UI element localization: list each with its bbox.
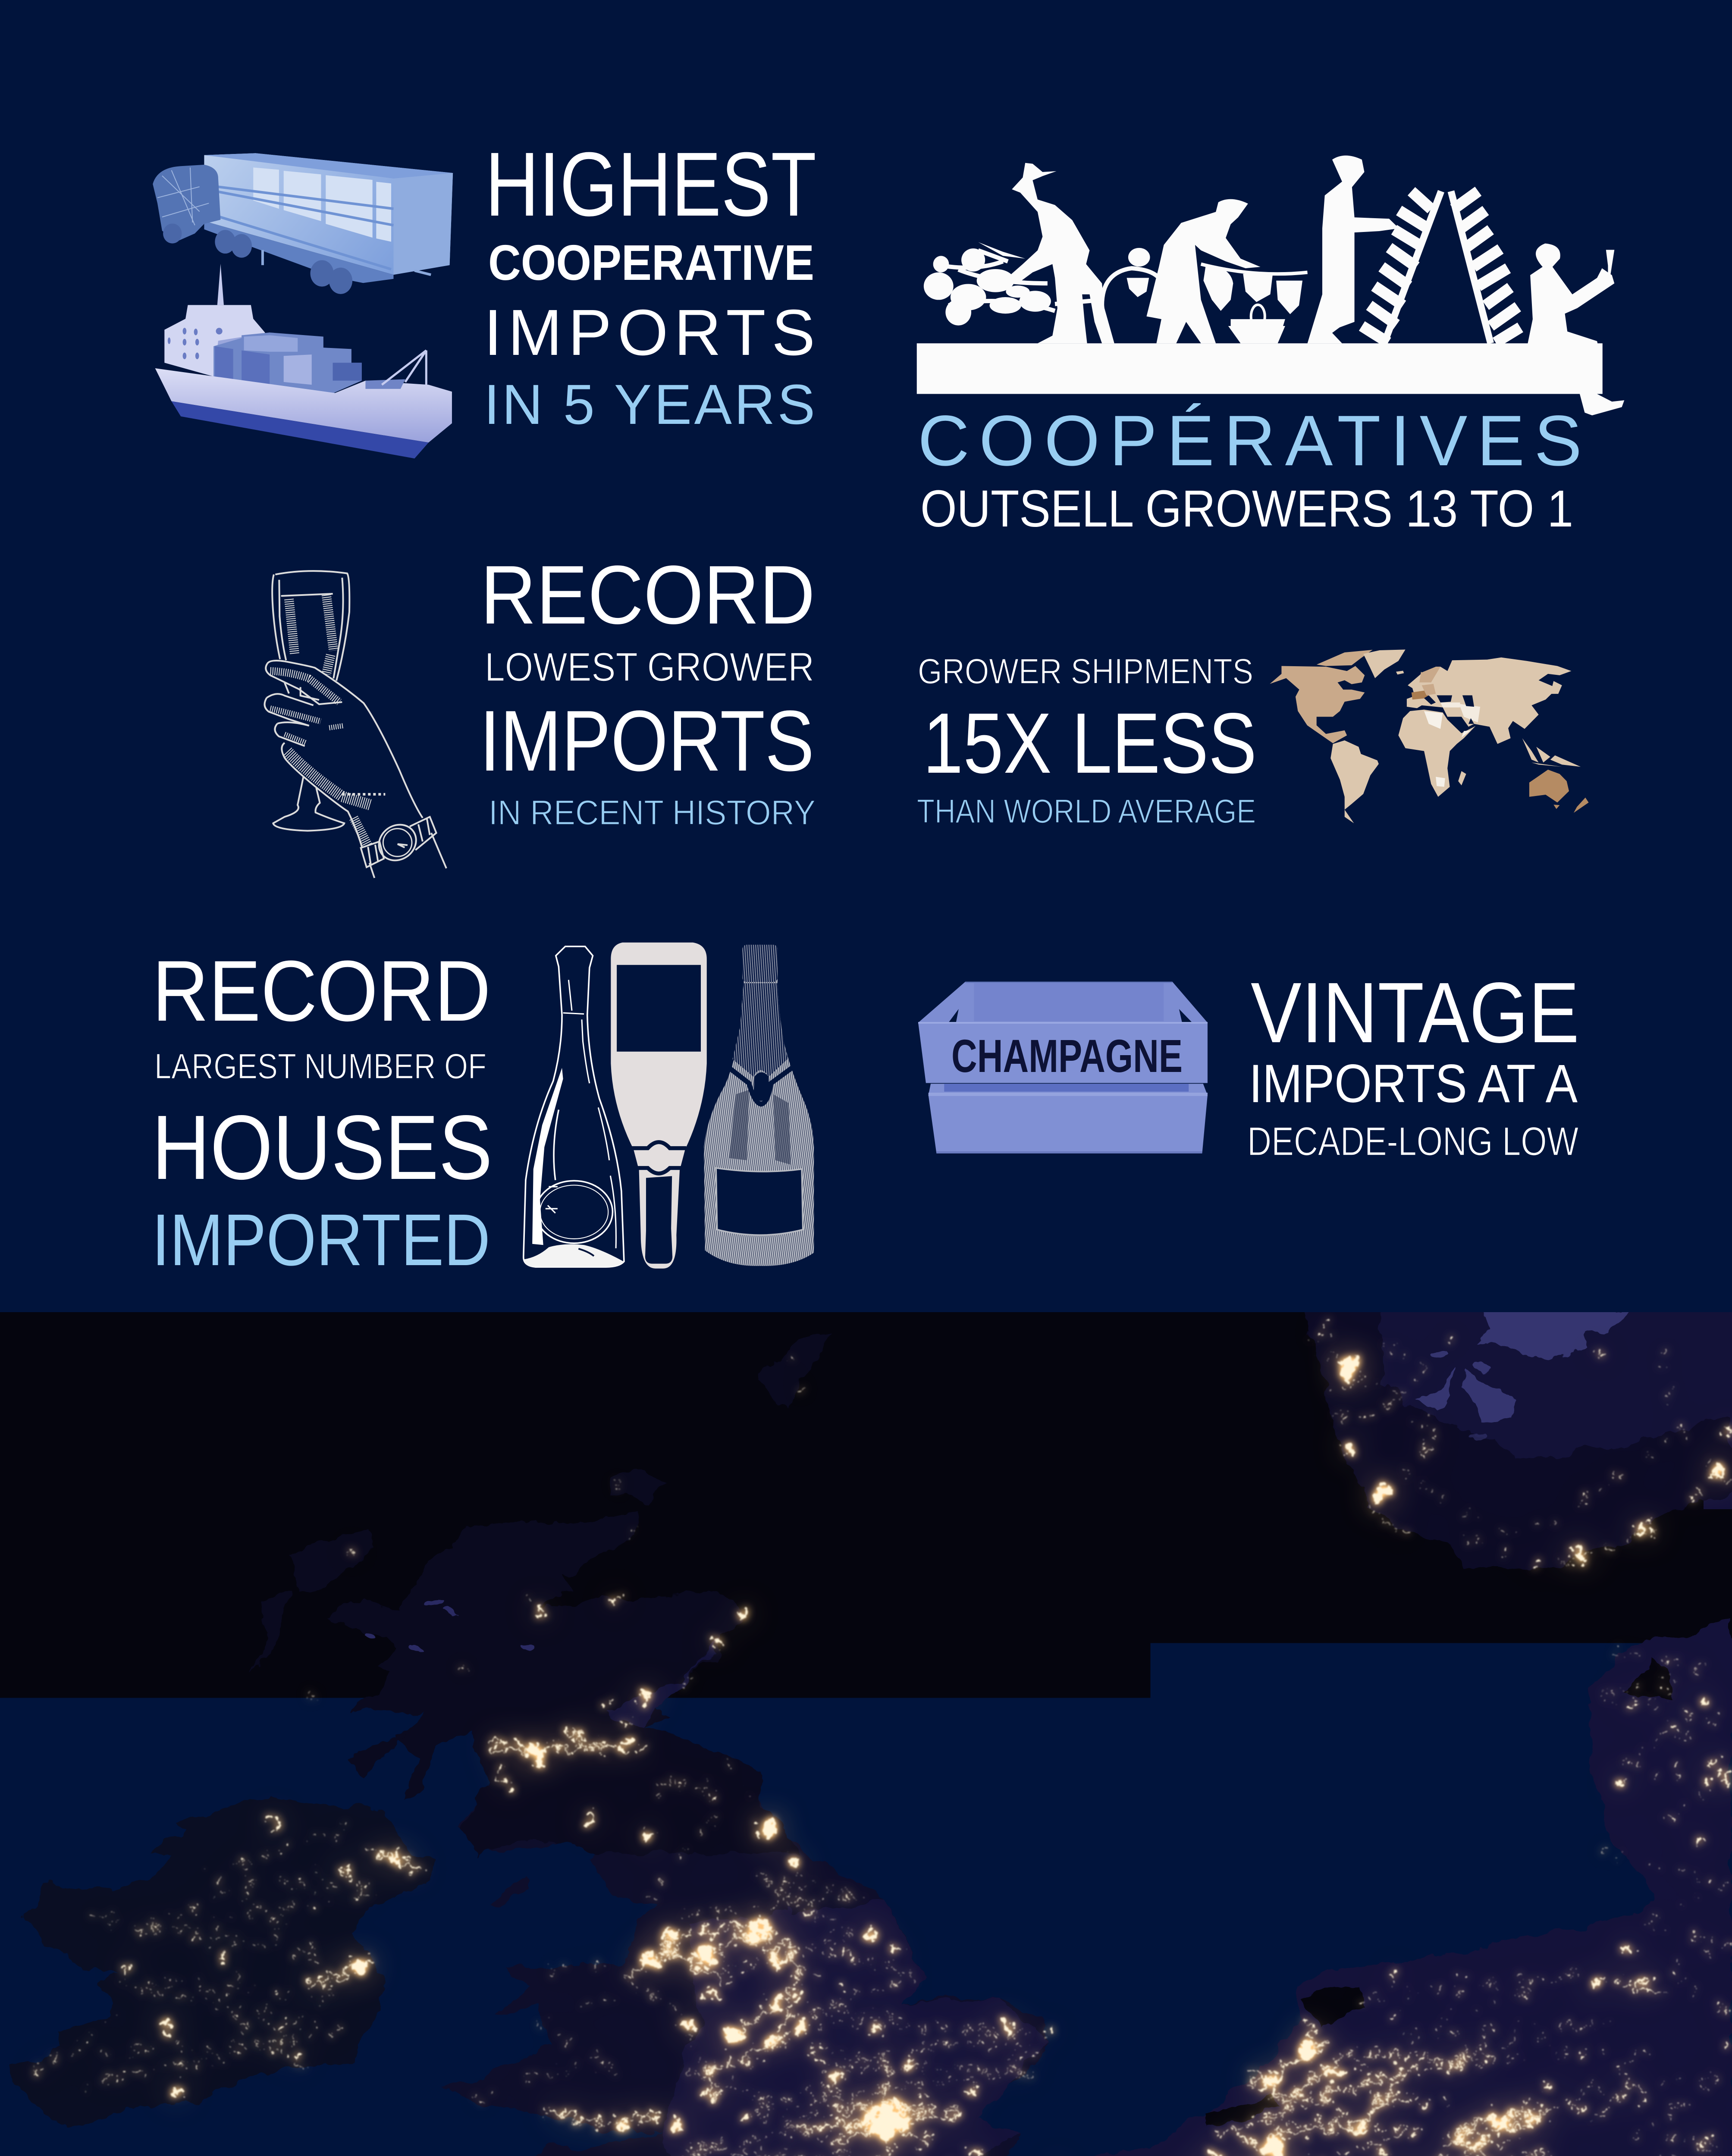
- icon: champagne workers silhouette: [917, 156, 1624, 415]
- land: Norway with snow: [1299, 1294, 1732, 1569]
- heading: highest cooperative imports in 5 years: IN 5 YEARS: [484, 373, 815, 436]
- riddler figure: [1308, 156, 1399, 343]
- heading: record largest number of houses imported: RECORD: [152, 943, 491, 1039]
- pruner figure: [1005, 163, 1114, 343]
- engraved bottle: [704, 945, 814, 1266]
- clear bottle: [524, 946, 624, 1267]
- heading: record lowest grower imports in recent history: IN RECENT HISTORY: [489, 793, 816, 832]
- harvester figure: [1146, 199, 1260, 343]
- seated drinker with glass: [1528, 244, 1624, 415]
- land: coasts with jagged edges: [10, 1294, 1732, 2156]
- heading: highest cooperative imports in 5 years: IMPORTS: [484, 296, 815, 369]
- glass and hand hatching: [270, 595, 385, 846]
- heading: record largest number of houses imported: LARGEST NUMBER OF: [154, 1046, 486, 1086]
- satellite map: Europe at night: [10, 1294, 1732, 2156]
- bench: [917, 343, 1603, 394]
- heading: vintage imports at a decade-long low: IMPORTS AT A: [1249, 1054, 1578, 1114]
- heading: vintage imports at a decade-long low: VINTAGE: [1251, 965, 1579, 1061]
- inland seas: [1417, 665, 1474, 724]
- heading: vintage imports at a decade-long low: [1247, 965, 1579, 1164]
- heading: grower shipments 15x less than world average: [917, 651, 1257, 830]
- heading: grower shipments 15x less than world average: GROWER SHIPMENTS: [918, 651, 1253, 691]
- heading: record lowest grower imports in recent history: [480, 548, 816, 832]
- icon: hand holding champagne glass: [265, 571, 446, 878]
- solid inverted bottle: [611, 943, 707, 1269]
- vine leaves: [924, 242, 1159, 326]
- icon: three champagne bottles: [524, 943, 814, 1269]
- heading: record largest number of houses imported: [152, 943, 493, 1281]
- heading: record lowest grower imports in recent history: RECORD: [480, 548, 815, 641]
- map background: night sky black: [0, 1312, 1732, 2156]
- heading: grower shipments 15x less than world average: 15X LESS: [923, 696, 1257, 791]
- lights: British Isles: [41, 1779, 1038, 2156]
- grapes and basket: [1201, 264, 1308, 343]
- heading: record largest number of houses imported: HOUSES: [152, 1096, 493, 1198]
- heading: coopératives outsell growers 13 to 1: [918, 401, 1582, 538]
- land: British Isles: [10, 1730, 1048, 2156]
- crate stencil label: CHAMPAGNE: [951, 1030, 1183, 1082]
- heading: record largest number of houses imported: IMPORTED: [152, 1199, 490, 1281]
- wristwatch: [361, 817, 436, 867]
- heading: highest cooperative imports in 5 years: [484, 133, 816, 436]
- africa: [1398, 710, 1475, 797]
- icon: world map: [1270, 649, 1589, 823]
- north america: [1270, 666, 1365, 743]
- icon: champagne crate: [918, 982, 1208, 1153]
- heading: grower shipments 15x less than world average: THAN WORLD AVERAGE: [917, 792, 1256, 830]
- heading: coopératives outsell growers 13 to 1: COOPÉRATIVES: [918, 401, 1582, 481]
- lights: Scotland: [312, 1360, 800, 1833]
- arctic islands and greenland: [1317, 649, 1406, 678]
- south america: [1330, 740, 1379, 823]
- heading: highest cooperative imports in 5 years: COOPERATIVE: [488, 235, 814, 291]
- icon: wireframe truck: [153, 153, 453, 294]
- land: continent: [495, 1617, 1732, 2156]
- heading: record lowest grower imports in recent history: IMPORTS: [480, 693, 814, 789]
- city lights: [41, 1329, 1729, 2156]
- panel: navy top section: [0, 0, 1732, 1312]
- land: Scotland: [254, 1329, 829, 1854]
- eurasia: [1407, 658, 1571, 744]
- land: edge strips: [561, 1312, 1732, 2156]
- heading: coopératives outsell growers 13 to 1: OUTSELL GROWERS 13 TO 1: [920, 479, 1573, 538]
- lights: continental Europe: [668, 1843, 1728, 2156]
- australia: [1529, 770, 1569, 802]
- heading: vintage imports at a decade-long low: DECADE-LONG LOW: [1247, 1119, 1578, 1164]
- heading: highest cooperative imports in 5 years: HIGHEST: [485, 133, 816, 235]
- heading: record lowest grower imports in recent history: LOWEST GROWER: [485, 644, 814, 689]
- islands: japan and south-east asia: [1522, 681, 1581, 767]
- icon: container ship: [155, 264, 452, 458]
- riddling rack: [1362, 191, 1520, 343]
- water: inlets and lakes: [1199, 1660, 1673, 2126]
- lights: Norway and Denmark: [1309, 1329, 1729, 1843]
